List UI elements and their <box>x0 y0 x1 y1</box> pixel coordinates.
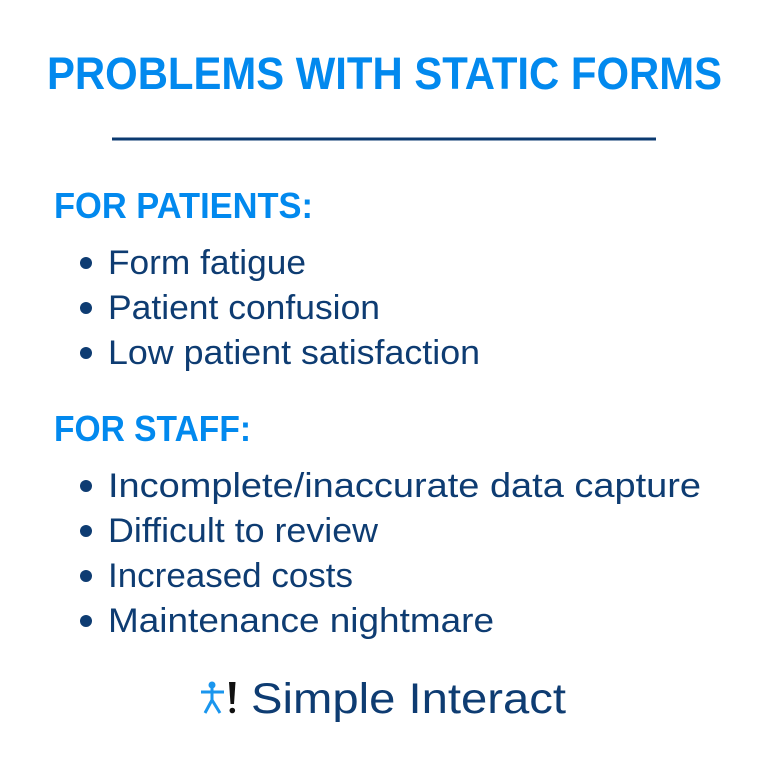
list: staff problems <box>80 467 701 640</box>
logo wordmark: Simple Interact <box>251 675 566 723</box>
list: patient problems: Low patient satisfaction <box>108 334 480 372</box>
list: staff problems: Incomplete/inaccurate data capture <box>108 467 701 505</box>
list: patient problems: Form fatigue <box>108 244 306 282</box>
title: PROBLEMS WITH STATIC FORMS <box>47 48 722 99</box>
panel: for patients <box>54 185 480 372</box>
heading: for staff: FOR STAFF: <box>54 408 251 449</box>
panel: for staff <box>54 408 701 640</box>
list: patient problems: Patient confusion <box>108 289 380 327</box>
icon: stick figure <box>201 682 224 713</box>
list: patient problems <box>80 244 480 372</box>
icon: exclamation mark <box>229 682 236 713</box>
list: staff problems: Increased costs <box>108 557 353 595</box>
heading: for patients: FOR PATIENTS: <box>54 185 313 226</box>
logo: Simple Interact <box>201 675 566 723</box>
list: staff problems: Maintenance nightmare <box>108 602 494 640</box>
list: staff problems: Difficult to review <box>108 512 378 550</box>
